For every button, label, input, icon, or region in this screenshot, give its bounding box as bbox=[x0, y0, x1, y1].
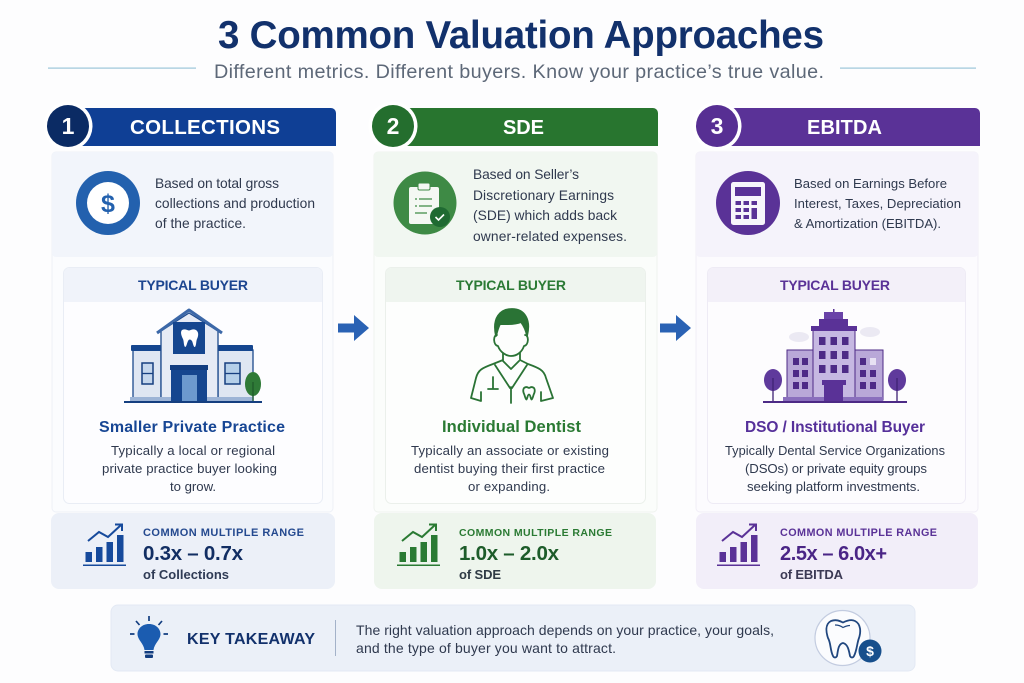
icon: growth chart bbox=[717, 524, 760, 566]
icon: calculator bbox=[716, 171, 780, 235]
panel: multiple range SDE: 1.0x – 2.0x bbox=[459, 542, 560, 565]
panel: EBITDA bbox=[692, 102, 980, 512]
panel: multiple range collections: of Collections bbox=[143, 567, 229, 582]
card: smaller private practice buyer: to grow. bbox=[170, 479, 216, 494]
panel: multiple range collections: 0.3x – 0.7x bbox=[143, 542, 244, 565]
icon: dollar coin bbox=[76, 171, 140, 235]
icon: growth chart bbox=[397, 524, 440, 566]
card: DSO institutional buyer: DSO / Institutional Buyer bbox=[745, 419, 925, 436]
card: DSO institutional buyer bbox=[708, 268, 966, 504]
card: DSO institutional buyer: (DSOs) or private equity groups bbox=[745, 461, 927, 476]
icon: clipboard with check bbox=[394, 172, 456, 234]
header: EBITDA: 3 bbox=[711, 113, 723, 139]
icon: light bulb bbox=[130, 616, 168, 658]
card: DSO institutional buyer: seeking platform investments. bbox=[747, 479, 920, 494]
title: 3 Common Valuation Approaches bbox=[218, 14, 824, 57]
card: smaller private practice buyer bbox=[64, 268, 322, 504]
icon: tooth with dollar badge: $ bbox=[866, 643, 874, 659]
description: collections: collections and production bbox=[155, 196, 315, 211]
icon: growth chart bbox=[83, 524, 126, 566]
description: SDE bbox=[473, 167, 627, 244]
description: EBITDA: & Amortization (EBITDA). bbox=[794, 216, 941, 231]
panel: multiple range SDE bbox=[374, 513, 656, 589]
panel: multiple range SDE: of SDE bbox=[459, 567, 501, 582]
description: EBITDA: Based on Earnings Before bbox=[794, 176, 947, 191]
panel: multiple range EBITDA: of EBITDA bbox=[780, 567, 844, 582]
card: individual dentist buyer: or expanding. bbox=[468, 479, 550, 494]
description: SDE: (SDE) which adds back bbox=[473, 208, 617, 223]
header: SDE: SDE bbox=[503, 117, 544, 139]
header: SDE: 2 bbox=[387, 113, 399, 139]
card: individual dentist buyer bbox=[386, 268, 646, 504]
description: SDE: Based on Seller’s bbox=[473, 167, 579, 182]
panel: multiple range collections bbox=[51, 513, 335, 589]
description: EBITDA: Interest, Taxes, Depreciation bbox=[794, 196, 961, 211]
card: individual dentist buyer: Typically an associate or existing bbox=[411, 443, 609, 458]
header: collections: 1 bbox=[62, 113, 75, 139]
header: collections bbox=[44, 102, 336, 150]
card: smaller private practice buyer: private practice buyer looking bbox=[102, 461, 277, 476]
panel: multiple range collections: COMMON MULTIPLE RANGE bbox=[143, 527, 304, 539]
header: EBITDA bbox=[692, 102, 980, 150]
card: DSO institutional buyer: Typically Dental Service Organizations bbox=[725, 443, 945, 458]
header: EBITDA: EBITDA bbox=[807, 117, 882, 139]
panel: multiple range EBITDA: COMMON MULTIPLE RANGE bbox=[780, 527, 937, 539]
card: individual dentist buyer: dentist buying their first practice bbox=[414, 461, 605, 476]
panel: key takeaway: and the type of buyer you want to attract. bbox=[356, 640, 616, 656]
panel: collections bbox=[44, 102, 336, 512]
description: SDE: owner-related expenses. bbox=[473, 229, 627, 244]
panel: multiple range SDE: COMMON MULTIPLE RANGE bbox=[459, 527, 612, 539]
icon: dollar coin: $ bbox=[101, 190, 115, 218]
panel: key takeaway: KEY TAKEAWAY bbox=[187, 631, 315, 648]
description: EBITDA bbox=[794, 176, 961, 231]
panel: multiple range EBITDA: 2.5x – 6.0x+ bbox=[780, 543, 887, 565]
card: individual dentist buyer: Individual Dentist bbox=[442, 418, 582, 436]
panel: multiple range EBITDA bbox=[696, 513, 978, 589]
panel: SDE bbox=[368, 102, 658, 512]
header: collections: COLLECTIONS bbox=[130, 116, 280, 139]
card: smaller private practice buyer: Smaller Private Practice bbox=[99, 419, 285, 436]
icon: tooth with dollar badge bbox=[815, 610, 882, 666]
card: individual dentist buyer: TYPICAL BUYER bbox=[456, 277, 566, 293]
icon: dental office building bbox=[124, 310, 262, 403]
arrow: collections to SDE bbox=[338, 315, 369, 341]
description: collections bbox=[155, 176, 315, 231]
icon: corporate building bbox=[763, 309, 907, 403]
header: SDE bbox=[368, 102, 658, 150]
description: collections: Based on total gross bbox=[155, 176, 279, 191]
description: collections: of the practice. bbox=[155, 216, 246, 231]
subtitle: Different metrics. Different buyers. Know your practice’s true value. bbox=[214, 61, 824, 83]
icon: dentist bbox=[471, 309, 553, 403]
card: DSO institutional buyer: TYPICAL BUYER bbox=[780, 277, 890, 293]
description: SDE: Discretionary Earnings bbox=[473, 188, 614, 203]
card: smaller private practice buyer: Typically a local or regional bbox=[111, 443, 275, 458]
panel: key takeaway bbox=[111, 605, 915, 671]
arrow: SDE to EBITDA bbox=[660, 315, 691, 341]
panel: key takeaway: The right valuation approach depends on your practice, your goals, bbox=[356, 622, 774, 638]
card: smaller private practice buyer: TYPICAL BUYER bbox=[138, 277, 248, 293]
